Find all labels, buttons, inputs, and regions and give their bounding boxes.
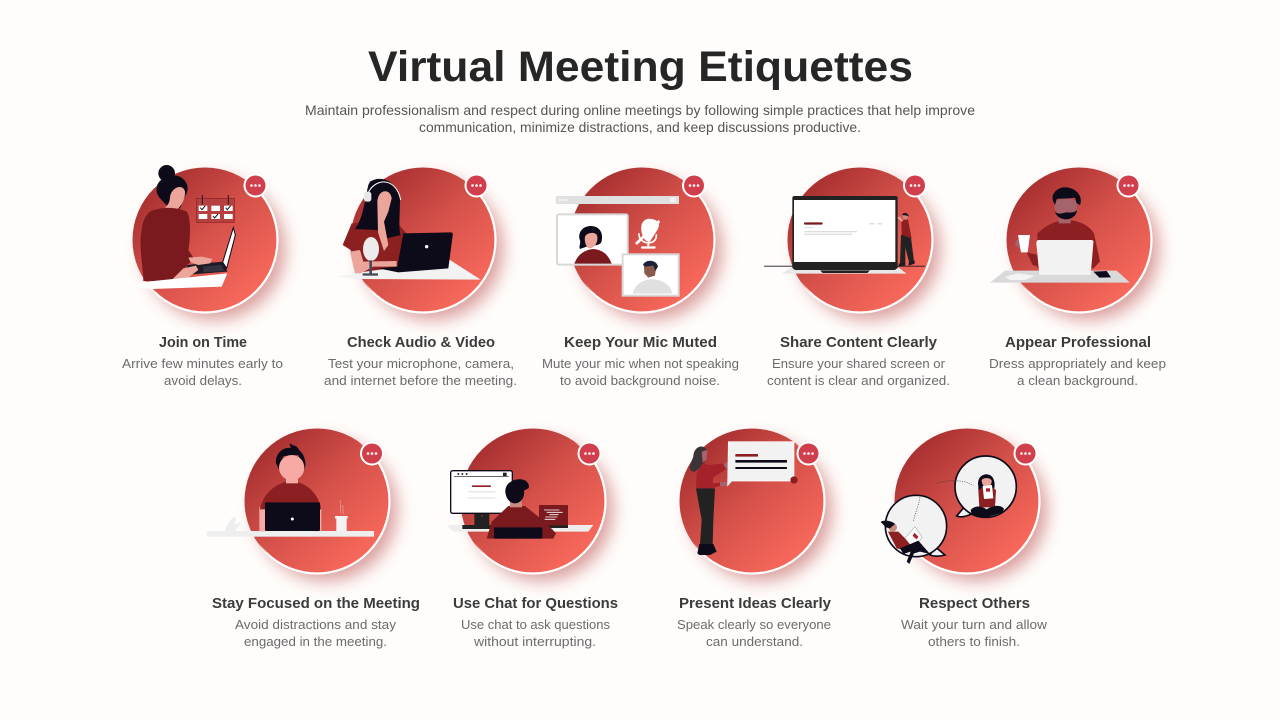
description: Avoid distractions and stay bbox=[235, 617, 397, 632]
description: and internet before the meeting. bbox=[324, 373, 517, 388]
illustration: woman at laptop with calendar bbox=[133, 165, 235, 289]
card: stay focused on the meeting bbox=[207, 428, 420, 649]
gradient circle bbox=[680, 428, 824, 574]
badge bbox=[578, 442, 602, 466]
description bbox=[122, 356, 283, 388]
description: engaged in the meeting. bbox=[244, 634, 387, 649]
description: without interrupting. bbox=[473, 634, 596, 649]
illustration: two people in speech bubbles bbox=[881, 456, 1016, 564]
heading: Share Content Clearly bbox=[780, 334, 938, 351]
heading: Stay Focused on the Meeting bbox=[212, 595, 420, 612]
badge bbox=[682, 174, 706, 198]
card: join on time bbox=[122, 165, 285, 388]
description bbox=[677, 617, 831, 649]
card: check audio and video bbox=[324, 168, 517, 388]
description: Ensure your shared screen or bbox=[772, 356, 946, 371]
description bbox=[324, 356, 517, 388]
illustration: bearded man with laptop and cup bbox=[990, 187, 1130, 283]
heading: Appear Professional bbox=[1005, 334, 1151, 351]
description bbox=[542, 356, 739, 388]
badge bbox=[1014, 442, 1038, 466]
description: Dress appropriately and keep bbox=[989, 356, 1166, 371]
illustration: large laptop with presenter bbox=[764, 196, 925, 274]
badge bbox=[360, 442, 384, 466]
description bbox=[461, 617, 610, 649]
description: can understand. bbox=[706, 634, 803, 649]
card: appear professional bbox=[989, 168, 1166, 388]
heading: Use Chat for Questions bbox=[453, 595, 618, 612]
subtitle: communication, minimize distractions, and keep discussions productive. bbox=[419, 119, 861, 135]
gradient circle bbox=[132, 168, 278, 312]
description bbox=[901, 617, 1048, 649]
gradient circle bbox=[894, 428, 1040, 574]
circle shadow bbox=[255, 439, 397, 581]
description: Speak clearly so everyone bbox=[677, 617, 831, 632]
gradient circle bbox=[1006, 168, 1152, 312]
description: Wait your turn and allow bbox=[901, 617, 1048, 632]
description: Mute your mic when not speaking bbox=[542, 356, 739, 371]
badge bbox=[464, 174, 488, 198]
illustration: woman with headset, microphone and laptop bbox=[337, 179, 481, 280]
illustration: person at desk with laptop and coffee bbox=[207, 443, 374, 537]
circle shadow bbox=[361, 178, 503, 320]
circle shadow bbox=[580, 178, 722, 320]
gradient circle bbox=[570, 168, 714, 312]
circle shadow bbox=[143, 178, 285, 320]
badge bbox=[244, 174, 268, 198]
badge bbox=[796, 442, 820, 466]
description: Arrive few minutes early to bbox=[122, 356, 283, 371]
description: others to finish. bbox=[928, 634, 1020, 649]
heading: Join on Time bbox=[159, 334, 247, 351]
heading: Present Ideas Clearly bbox=[679, 595, 832, 612]
heading: Check Audio & Video bbox=[347, 334, 495, 351]
description: avoid delays. bbox=[164, 373, 242, 388]
description bbox=[989, 356, 1166, 388]
gradient circle bbox=[788, 168, 932, 312]
title: Virtual Meeting Etiquettes bbox=[368, 43, 913, 91]
circle shadow bbox=[798, 178, 940, 320]
card: share content clearly bbox=[764, 168, 950, 388]
illustration: video call windows and muted mic bbox=[556, 196, 679, 296]
circle shadow bbox=[690, 439, 832, 581]
gradient circle bbox=[244, 428, 390, 574]
subtitle: Maintain professionalism and respect during online meetings by following simple practices that help improve bbox=[305, 102, 975, 118]
card: use chat for questions bbox=[447, 428, 618, 649]
description bbox=[235, 617, 397, 649]
circle shadow bbox=[471, 439, 613, 581]
illustration: person at monitor with chat window bbox=[447, 471, 593, 539]
heading: Keep Your Mic Muted bbox=[564, 334, 717, 351]
heading: Respect Others bbox=[919, 595, 1030, 612]
circle shadow bbox=[1017, 178, 1159, 320]
gradient circle bbox=[350, 168, 496, 312]
badge bbox=[903, 174, 927, 198]
card: keep your mic muted bbox=[542, 168, 739, 388]
description: a clean background. bbox=[1017, 373, 1138, 388]
description: content is clear and organized. bbox=[767, 373, 950, 388]
description: Test your microphone, camera, bbox=[328, 356, 514, 371]
subtitle bbox=[305, 102, 975, 135]
card: respect others bbox=[881, 428, 1048, 649]
gradient circle bbox=[460, 428, 606, 574]
circle shadow bbox=[905, 439, 1047, 581]
description bbox=[767, 356, 950, 388]
description: Use chat to ask questions bbox=[461, 617, 610, 632]
card: present ideas clearly bbox=[677, 428, 832, 649]
badge bbox=[1116, 174, 1140, 198]
illustration: woman presenting speech board bbox=[690, 442, 798, 555]
description: to avoid background noise. bbox=[560, 373, 720, 388]
